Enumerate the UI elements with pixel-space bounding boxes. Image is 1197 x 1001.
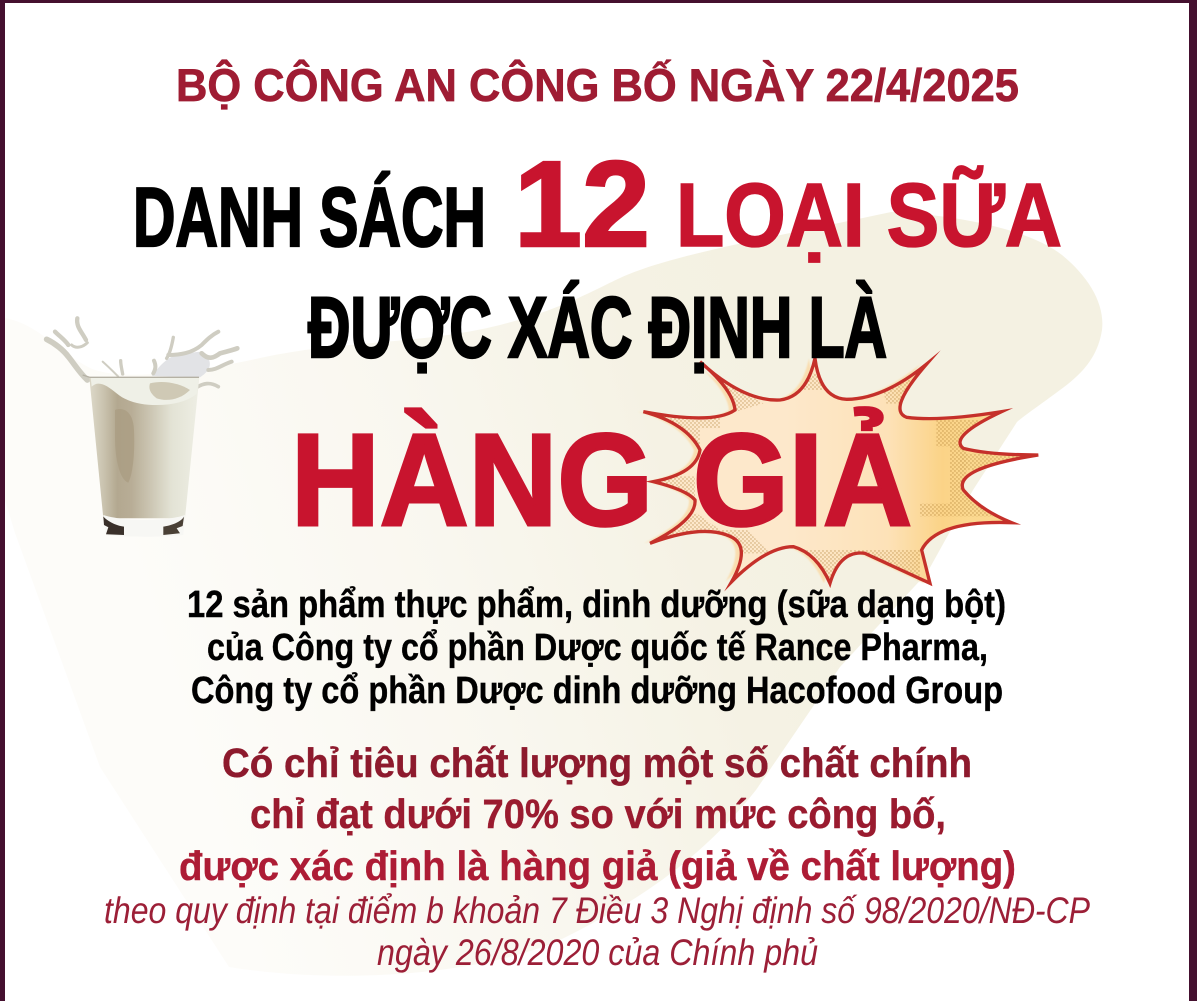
milk surface shadow bbox=[149, 382, 190, 400]
milk splash bbox=[47, 318, 237, 387]
burst body bbox=[643, 358, 1038, 583]
statement line 1: Có chỉ tiêu chất lượng một số chất chính bbox=[222, 740, 972, 786]
title: number 12: 12 bbox=[514, 136, 650, 272]
burst soft shadow bbox=[637, 358, 1032, 583]
title: loai sua: LOẠI SỮA bbox=[676, 165, 1062, 266]
description line 3: Công ty cổ phần Dược dinh dưỡng Hacofood Group bbox=[191, 670, 1003, 712]
title: gia: GIẢ bbox=[693, 406, 912, 553]
icon: glass of milk bbox=[47, 318, 237, 537]
legal reference bbox=[104, 890, 1090, 973]
description line 2: của Công ty cổ phần Dược quốc tế Rance Pharma, bbox=[207, 627, 988, 669]
main title bbox=[133, 136, 1062, 553]
splash light part bbox=[152, 352, 210, 377]
brown milk shading bbox=[115, 409, 134, 483]
glass base bbox=[103, 515, 185, 537]
title: duoc xac dinh la: ĐƯỢC XÁC ĐỊNH LÀ bbox=[308, 280, 887, 376]
background map shape bbox=[5, 212, 1102, 976]
top heading: BỘ CÔNG AN CÔNG BỐ NGÀY 22/4/2025 bbox=[176, 59, 1019, 111]
description line 1: 12 sản phẩm thực phẩm, dinh dưỡng (sữa dạng bột) bbox=[187, 584, 1006, 626]
legal line 2: ngày 26/8/2020 của Chính phủ bbox=[377, 932, 818, 973]
statement line 3: được xác định là hàng giả (giả về chất lượng) bbox=[179, 843, 1016, 889]
glass body bbox=[89, 377, 199, 518]
title: hang: HÀNG bbox=[291, 406, 653, 553]
title: danh sach: DANH SÁCH bbox=[133, 170, 486, 264]
glass rim bbox=[83, 375, 199, 377]
red statement bbox=[179, 740, 1016, 889]
description text bbox=[187, 584, 1006, 712]
statement line 2: chỉ đạt dưới 70% so với mức công bố, bbox=[250, 791, 946, 837]
burst icon bbox=[637, 358, 1038, 583]
milk surface bbox=[91, 377, 199, 405]
